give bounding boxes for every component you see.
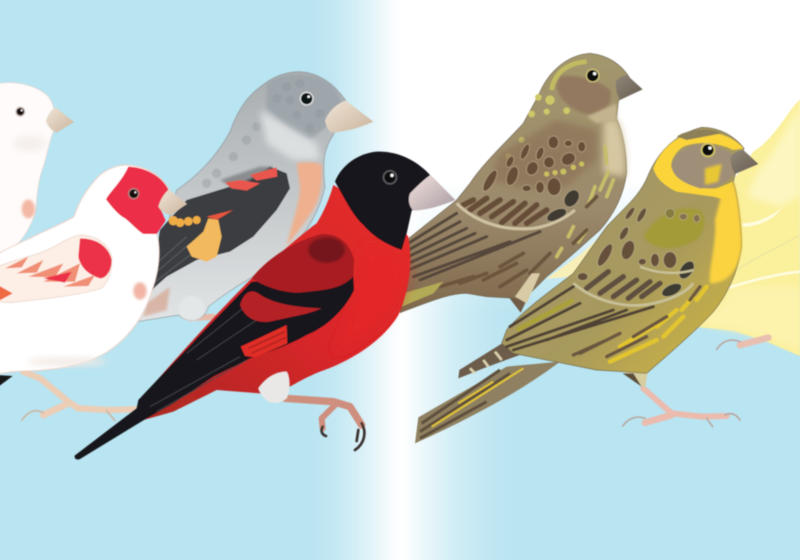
eye (383, 170, 397, 185)
lower tail (415, 362, 560, 443)
eye (701, 143, 715, 157)
black wing and tail (75, 276, 354, 460)
eye (300, 92, 314, 106)
yellow face band (653, 132, 743, 200)
bird: white and red finch (0, 165, 187, 421)
bird: yellow and brown canary (415, 127, 758, 443)
scalloped feathers (202, 79, 325, 188)
leg and claws (285, 398, 364, 450)
covert streaks (587, 272, 660, 298)
bird: red and black finch (75, 152, 455, 460)
primaries (408, 213, 540, 280)
leg and foot (623, 388, 740, 427)
eye (586, 69, 600, 83)
white belly (258, 372, 289, 403)
red body (140, 185, 410, 420)
upper tail (458, 343, 533, 378)
flank streaks (610, 287, 707, 362)
eye (15, 107, 25, 117)
pale breast (603, 118, 626, 177)
orange breast (287, 162, 322, 247)
vent (143, 287, 170, 317)
bird: grey finch (137, 72, 373, 322)
black wing (150, 167, 290, 292)
red wing bar (240, 291, 322, 322)
tail tip (0, 375, 13, 388)
mantle spots (577, 206, 700, 299)
grey cheek (672, 144, 735, 188)
beak (409, 175, 455, 211)
mantle (490, 120, 597, 190)
wing tip of pale canary (547, 239, 600, 279)
grey head cap (267, 75, 343, 140)
beak (46, 107, 74, 133)
beak (616, 75, 643, 100)
pale throat (260, 110, 320, 160)
flank streaks (557, 147, 613, 257)
bird: brown female canary (390, 53, 643, 313)
leg and foot (22, 372, 137, 421)
eye (128, 188, 139, 199)
foot (190, 317, 213, 318)
primaries (517, 300, 573, 330)
mantle spots (480, 136, 586, 224)
body (502, 127, 744, 373)
bird: white canary top left (0, 83, 74, 388)
dark red coverts (252, 234, 354, 293)
vent (515, 273, 540, 303)
covert streaks (463, 198, 547, 223)
cheek (557, 76, 611, 115)
beak (731, 150, 758, 174)
beak (158, 189, 187, 215)
olive mantle (643, 208, 704, 248)
pale throat (587, 103, 617, 123)
yellow brow and nape (552, 62, 587, 90)
red secondary patch (241, 325, 287, 357)
foot of pale canary (717, 338, 768, 349)
crown (677, 130, 722, 140)
yellow breast (710, 182, 742, 283)
beak (325, 101, 373, 133)
bird: pale yellow canary behind (547, 99, 800, 356)
leg (508, 285, 532, 313)
yellow bar (544, 161, 584, 177)
cheek and flank tint (133, 282, 147, 300)
red wing marks (250, 167, 277, 181)
wing (0, 235, 112, 303)
orange wing marks (187, 218, 222, 262)
red mask (106, 167, 168, 234)
black head (335, 152, 435, 250)
red wing patch (78, 238, 112, 278)
